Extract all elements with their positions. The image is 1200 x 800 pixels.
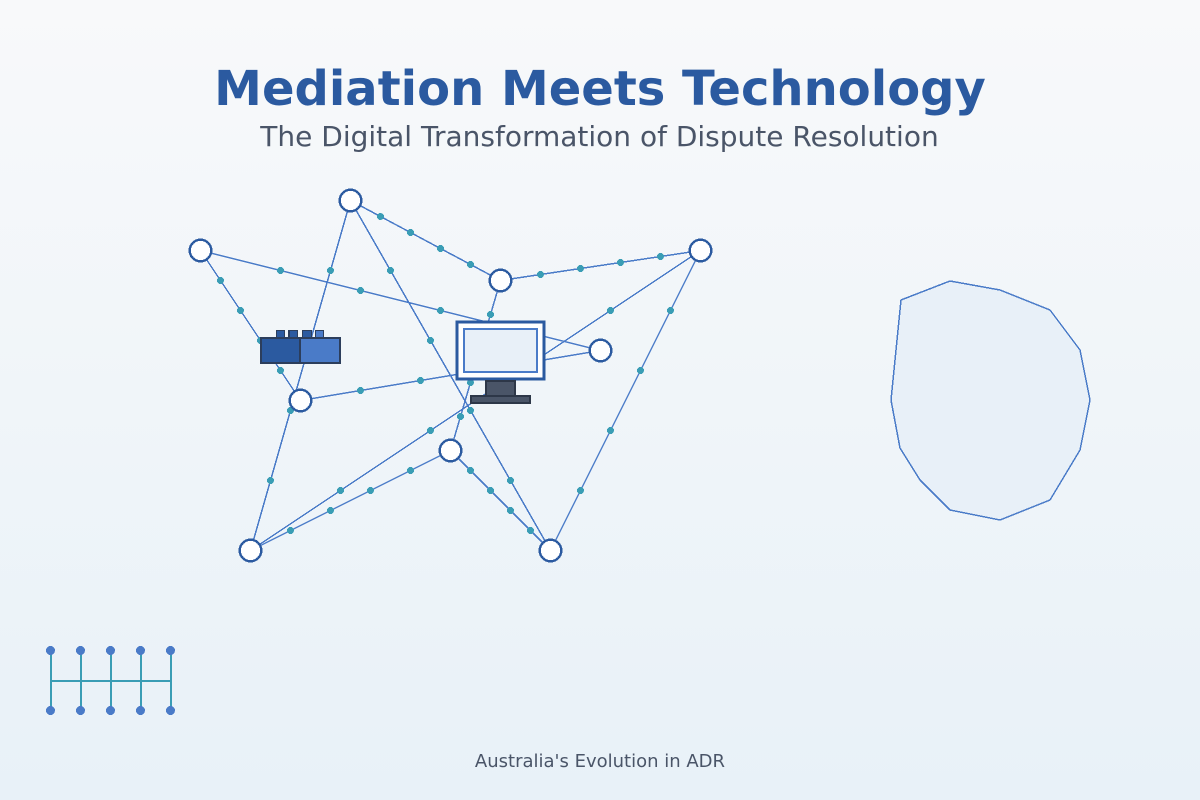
footer caption: Australia's Evolution in ADR: [475, 751, 725, 772]
network nodes: [190, 190, 711, 561]
icon: connected building blocks: [261, 330, 340, 363]
icon: computer monitor: [457, 322, 544, 403]
map outline: Australia: [891, 281, 1090, 520]
icon: circuit grid: [46, 646, 175, 715]
subtitle: The Digital Transformation of Dispute Resolution: [259, 120, 939, 153]
network diagram: [190, 190, 711, 561]
network connections: [200, 200, 700, 550]
title: Mediation Meets Technology: [214, 61, 986, 117]
data packets on connections: [217, 213, 674, 534]
